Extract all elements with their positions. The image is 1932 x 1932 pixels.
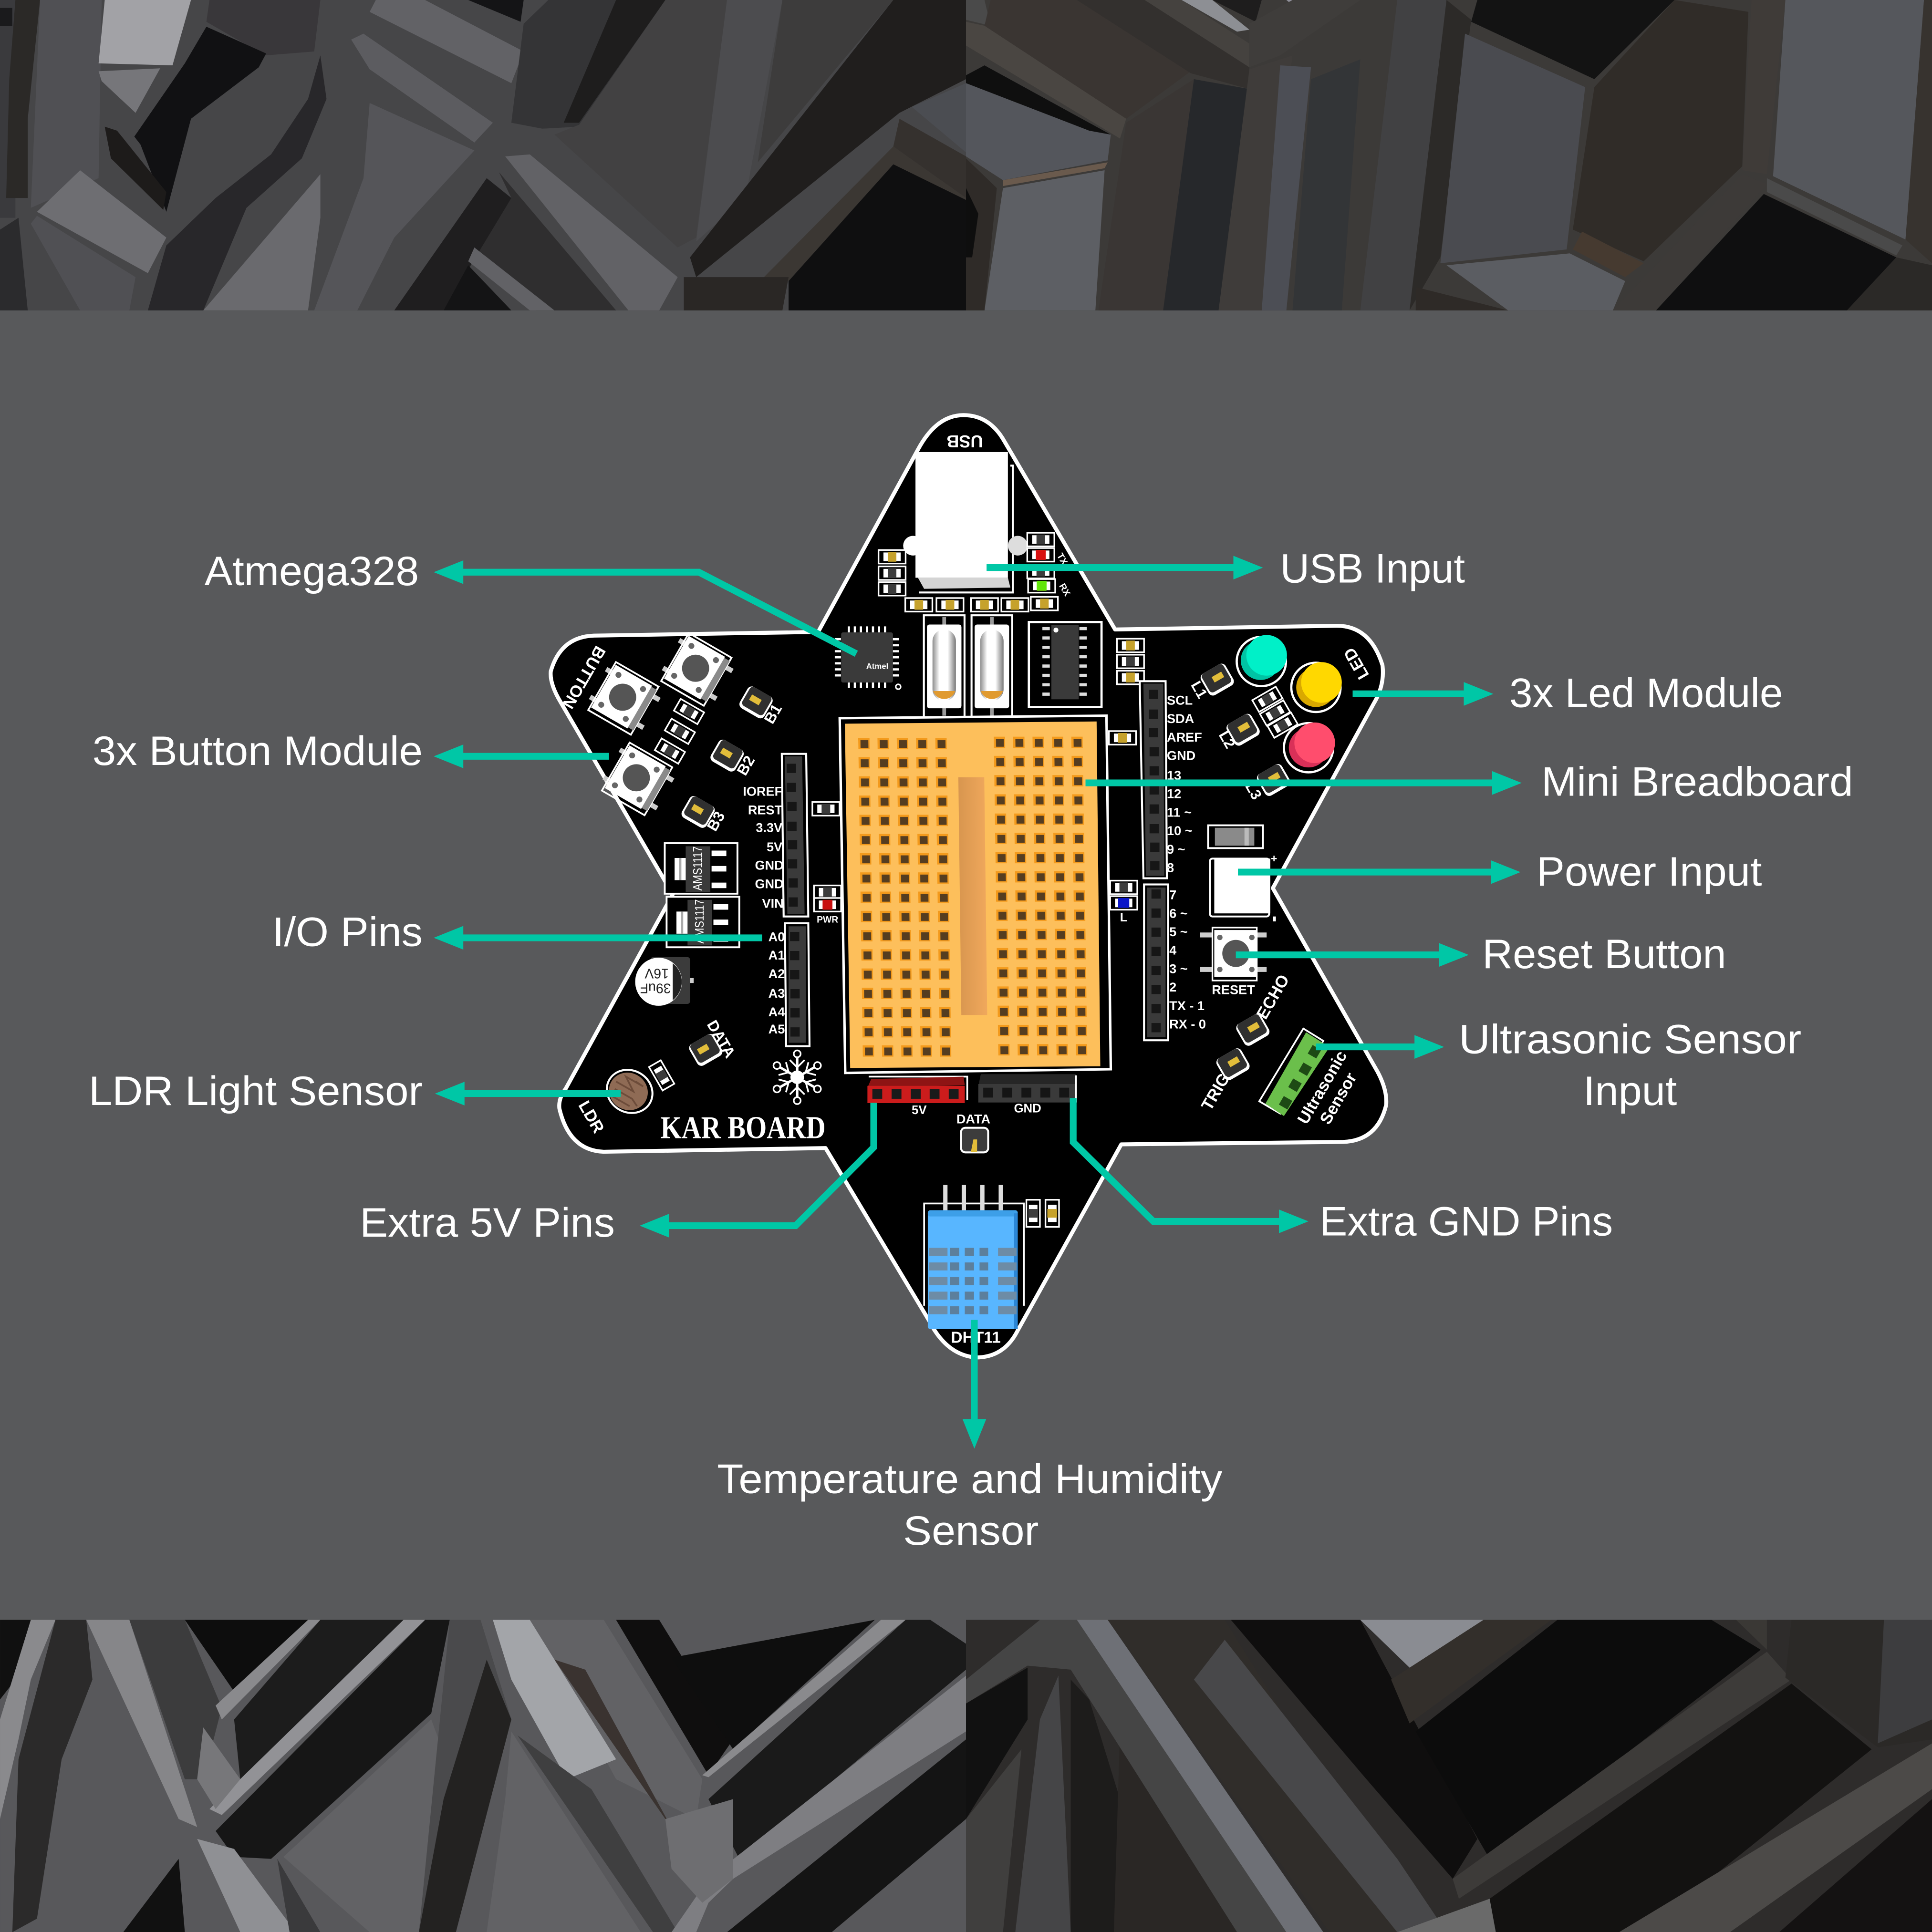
header: analog pins [769,923,810,1046]
USB connector: USB [946,432,983,451]
board outline [551,415,1386,1357]
header: digital pins upper: SDA [1167,711,1194,726]
arrow: LDR Light Sensor [435,1082,621,1105]
header: power pins: IOREF [743,784,782,799]
arrow: I/O Pins [434,926,762,950]
snowflake logo [770,1050,824,1104]
label: Extra GND Pins: Extra GND Pins [1319,1199,1613,1245]
header: analog pins: A3 [769,986,785,1001]
label: Reset Button: Reset Button [1482,931,1726,977]
header: digital pins upper: 12 [1167,786,1181,801]
header: digital pins upper: 13 [1167,768,1181,783]
arrow: Reset Button [1236,943,1469,967]
DIP IC [1029,622,1101,707]
mini breadboard [840,716,1111,1073]
ATmega328 chip: Atmel [866,662,888,671]
button modules [559,630,785,834]
header: digital pins lower: 4 [1169,943,1176,958]
ultrasonic sensor terminal: TRIG [1198,1070,1234,1114]
label: LDR Light Sensor: LDR Light Sensor [89,1068,423,1114]
LED modules: L1 [1188,678,1211,702]
5V header [867,1076,967,1117]
button modules: B1 [760,701,785,727]
LED modules: LED [1340,644,1373,682]
arrow: 3x Led Module [1353,682,1493,706]
ultrasonic sensor terminal [1198,971,1361,1127]
header: power pins: REST [748,802,783,817]
DATA jumper bottom: DATA [956,1112,990,1126]
header: digital pins upper: 9 ~ [1167,842,1185,857]
AMS1117 regulators: AMS1117 [693,899,706,943]
button modules: B2 [734,753,758,778]
KAR BOARD brand: KAR BOARD [660,1110,826,1146]
power input with diode: + [1271,852,1278,865]
DHT11 sensor [924,1185,1024,1346]
label: USB Input: USB Input [1280,546,1465,592]
top photo strip [0,0,1932,310]
header: digital pins lower: 5 ~ [1169,924,1188,939]
label: Temperature and Humidity Sensor [717,1456,1223,1554]
DHT11 sensor: DHT11 [951,1329,1001,1346]
label: Atmega328: Atmega328 [205,548,419,594]
data jumper [687,1017,739,1068]
header: digital pins upper: 10 ~ [1167,823,1193,838]
arrow: Extra GND Pins [1073,1098,1309,1233]
label: Ultrasonic Sensor Input [1459,1016,1801,1114]
label: Power Input: Power Input [1537,849,1762,895]
arrow: Extra 5V Pins [640,1103,874,1238]
header: digital pins lower: 6 ~ [1169,906,1188,920]
header: digital pins lower: 2 [1169,980,1176,994]
label: Temperature and Humidity Sensor: Sensor [903,1508,1039,1554]
header: digital pins upper [1140,681,1202,878]
header: power pins: 5V [767,839,782,854]
ATmega328 chip [838,630,901,689]
arrow: USB Input [987,556,1263,579]
label: 3x Button Module: 3x Button Module [93,728,423,774]
capacitor: 39uF [640,980,671,995]
SMD components: PWR [817,915,838,925]
header: digital pins lower: TX - 1 [1169,998,1205,1013]
SMD components: TX [1055,551,1070,567]
label: I/O Pins: I/O Pins [272,909,423,955]
header: power pins: GND [755,876,784,891]
LED modules [1188,635,1373,803]
reset button: RESET [1212,982,1255,997]
header: digital pins lower: 7 [1169,888,1176,902]
header: power pins: GND [755,858,784,873]
USB connector [903,432,1028,592]
LED modules: L3 [1242,779,1265,803]
power input with diode [1208,826,1278,921]
arrow: Power Input [1238,860,1520,884]
arrow: Temperature and Humidity [963,1320,986,1448]
header: digital pins upper: 8 [1167,860,1174,875]
GND header [978,1074,1077,1115]
header: digital pins upper: AREF [1167,730,1202,744]
header: analog pins: A2 [769,966,785,981]
arrow: Ultrasonic Sensor [1316,1035,1444,1059]
arrow: 3x Button Module [434,744,609,768]
AMS1117 regulators [665,843,739,947]
ultrasonic sensor terminal: ECHO [1253,971,1293,1023]
SMD components: L [1120,911,1128,924]
reset button [1200,928,1267,997]
AMS1117 regulators: AMS1117 [691,846,705,890]
ultrasonic sensor terminal: Sensor [1316,1069,1361,1127]
arrow: Atmega328 [434,560,856,654]
label: Temperature and Humidity Sensor: Temperature and Humidity [717,1456,1223,1502]
capacitor: 16V [644,965,669,981]
label: Ultrasonic Sensor Input: Ultrasonic Sensor [1459,1016,1801,1062]
SMD components: RX [1057,582,1072,598]
label: 3x Led Module: 3x Led Module [1509,671,1783,716]
ultrasonic sensor terminal: Ultrasonic [1294,1048,1350,1127]
header: analog pins: A0 [769,929,785,944]
label: Ultrasonic Sensor Input: Input [1583,1068,1677,1114]
header: digital pins upper: GND [1167,748,1195,763]
header: digital pins upper: 11 ~ [1167,805,1192,819]
header: power pins: 3.3V [756,820,782,835]
LDR light sensor: LDR [575,1097,608,1136]
header: digital pins lower: 3 ~ [1169,961,1188,976]
data jumper: DATA [704,1017,739,1061]
LDR light sensor [575,1062,660,1136]
header: power pins: VIN [762,896,784,911]
SMD components [649,533,1298,1227]
5V header: 5V [912,1104,927,1117]
header: digital pins lower: RX - 0 [1169,1017,1206,1032]
header: analog pins: A5 [769,1022,785,1036]
label: Mini Breadboard: Mini Breadboard [1541,759,1853,805]
LED modules: L2 [1215,728,1238,751]
header: analog pins: A1 [769,948,785,962]
header: digital pins lower [1144,885,1206,1040]
label: Extra 5V Pins: Extra 5V Pins [360,1200,615,1246]
GND header: GND [1014,1102,1041,1115]
crystals [924,615,1012,718]
circuit board [551,415,1386,1357]
button modules: BUTTON [559,643,609,712]
capacitor [635,957,694,1006]
header: power pins [743,754,808,917]
header: analog pins: A4 [769,1004,785,1019]
arrow: Mini Breadboard [1086,771,1522,795]
DATA jumper bottom [956,1112,990,1152]
button modules: B3 [704,808,728,834]
header: digital pins upper: SCL [1167,692,1193,707]
bottom photo strip [0,1620,1932,1932]
